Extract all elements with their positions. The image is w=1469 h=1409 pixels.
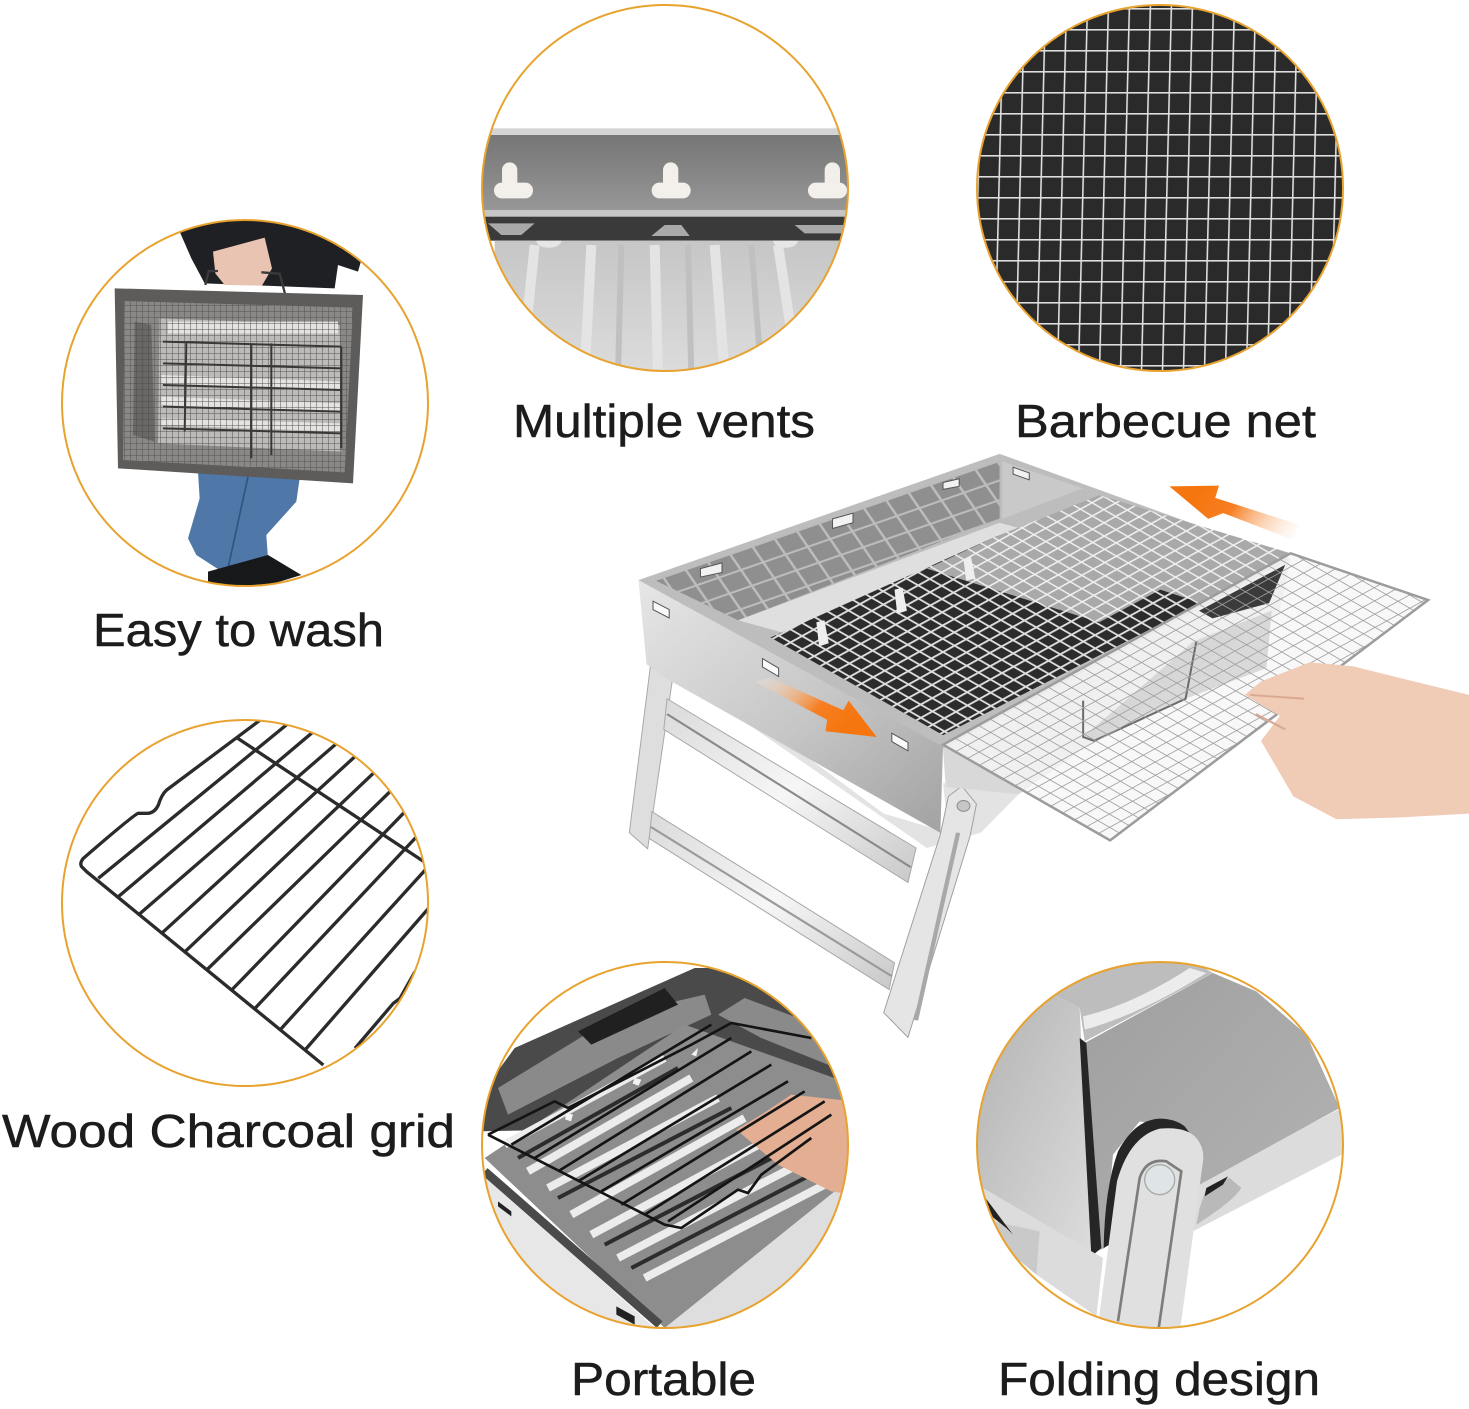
inner dark grate bbox=[771, 536, 1202, 735]
main product: folding grill bbox=[629, 454, 1469, 1037]
shoes bbox=[208, 555, 301, 588]
panel: wood charcoal grid bbox=[62, 718, 430, 1086]
handle bbox=[205, 271, 285, 295]
lower rail bbox=[649, 812, 894, 990]
icon: rivet bbox=[1145, 1165, 1175, 1195]
grill basin interior bbox=[638, 454, 1291, 749]
cross rail bbox=[237, 738, 425, 862]
upper rail bbox=[664, 699, 916, 882]
wire rack bbox=[488, 1023, 831, 1228]
grill case bbox=[115, 288, 363, 483]
icon: arrow up-left bbox=[1169, 486, 1299, 540]
hand bbox=[1245, 662, 1469, 819]
heading: folding design: Folding design bbox=[998, 1353, 1320, 1405]
panel: multiple vents bbox=[478, 5, 853, 375]
jacket bbox=[180, 218, 361, 288]
icon: hand holding rack bbox=[736, 1095, 853, 1195]
heading: barbecue net: Barbecue net bbox=[1015, 395, 1316, 447]
panel: barbecue net bbox=[975, 0, 1345, 380]
slot bbox=[1196, 1178, 1241, 1225]
left plate bbox=[973, 995, 1091, 1255]
front panel bbox=[638, 580, 943, 833]
jeans bbox=[188, 472, 300, 573]
hinge arm bbox=[1097, 1128, 1203, 1333]
underside bbox=[706, 695, 1018, 848]
panel: folding design bbox=[973, 958, 1348, 1333]
back wall bbox=[478, 968, 853, 1131]
pulled net bbox=[943, 553, 1428, 840]
heading: easy to wash: Easy to wash bbox=[93, 604, 384, 656]
wires bbox=[98, 723, 430, 1050]
right plate bbox=[1085, 973, 1340, 1251]
rack frame bbox=[81, 718, 323, 1065]
icon: arrow down-right bbox=[754, 678, 877, 737]
panel: easy to wash bbox=[62, 218, 428, 588]
right side panel below net bbox=[943, 559, 1291, 794]
hand bbox=[213, 238, 272, 286]
front leg bbox=[884, 786, 976, 1037]
heading: multiple vents: Multiple vents bbox=[513, 395, 815, 447]
heading: wood charcoal grid: Wood Charcoal grid bbox=[2, 1105, 455, 1157]
grate hooks bbox=[816, 557, 975, 646]
vent slots bbox=[700, 467, 1029, 577]
rear leg bbox=[629, 662, 672, 849]
black seam bbox=[1080, 1038, 1101, 1256]
icon: keyhole vent slots bbox=[494, 162, 847, 198]
heading: portable: Portable bbox=[571, 1353, 756, 1405]
top reflections bbox=[1053, 961, 1213, 1041]
floor bbox=[485, 1025, 853, 1328]
bottom left plate bbox=[983, 1188, 1103, 1316]
front panels bbox=[485, 1175, 655, 1333]
lower strip bbox=[1194, 1110, 1342, 1231]
panel: portable bbox=[478, 958, 853, 1333]
